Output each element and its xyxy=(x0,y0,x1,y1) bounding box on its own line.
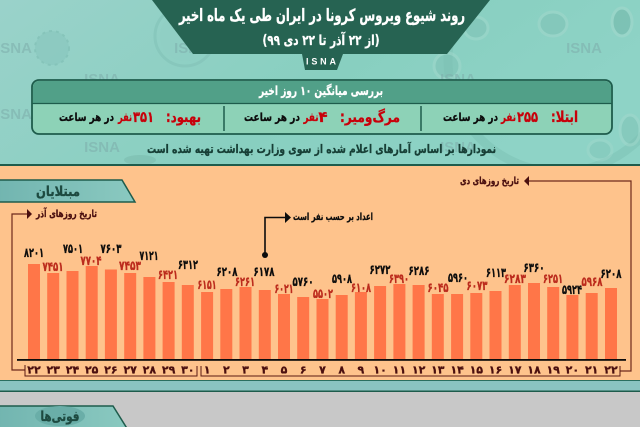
date axis labels: ۲۲ xyxy=(604,364,618,376)
value labels: ۷۴۵۳ xyxy=(119,259,141,274)
date axis labels: ۲۲ xyxy=(27,364,41,376)
date axis labels: ۸ xyxy=(338,364,345,376)
section tab: infected xyxy=(0,180,135,202)
date axis labels: ۱۰ xyxy=(373,364,387,376)
value labels: ۵۷۶۰ xyxy=(292,275,314,290)
bracket: Azar dates: تاریخ روزهای آذر xyxy=(35,207,97,220)
stat: recovered: ۳۵۱ xyxy=(133,108,154,126)
date axis labels: ۲۵ xyxy=(85,364,99,376)
date axis labels xyxy=(27,364,618,376)
date axis labels: ۲۱ xyxy=(585,364,598,376)
summary panel xyxy=(32,80,612,134)
value labels xyxy=(24,242,622,302)
value labels: ۷۶۰۳ xyxy=(100,242,122,257)
ISNA tab xyxy=(302,54,343,70)
section tab: infected: مبتلایان xyxy=(36,184,80,200)
value labels: ۵۵۰۲ xyxy=(313,287,333,302)
value labels: ۵۹۶۸ xyxy=(582,275,603,290)
value labels: ۶۳۱۲ xyxy=(178,258,198,273)
date axis labels: ۱۷ xyxy=(508,364,522,376)
date axis labels: ۲۰ xyxy=(566,364,579,376)
panel: infected chart xyxy=(0,164,640,380)
stat: recovered: بهبود: xyxy=(166,108,201,126)
date axis labels: ۱ xyxy=(204,364,210,376)
bar chart xyxy=(28,264,617,359)
bracket: Azar dates xyxy=(12,207,197,376)
value labels: ۶۲۸۶ xyxy=(408,264,430,279)
value labels: ۸۲۰۱ xyxy=(24,246,44,261)
value labels: ۶۱۵۱ xyxy=(198,278,216,293)
date axis labels: ۳ xyxy=(242,364,249,376)
date axis labels: ۲۸ xyxy=(143,364,156,376)
stat: deaths: در هر ساعت xyxy=(244,110,300,124)
value labels: ۶۱۰۸ xyxy=(351,281,371,296)
date axis labels: ۱۹ xyxy=(546,364,560,376)
stat: deaths: نفر xyxy=(303,110,318,124)
date axis labels: ۱۲ xyxy=(412,364,426,376)
stat: deaths: مرگ‌ومیر: xyxy=(340,108,400,126)
date axis labels: ۵ xyxy=(281,364,288,376)
bracket: Dey dates xyxy=(201,176,631,376)
value labels: ۶۲۰۸ xyxy=(600,267,622,282)
value labels: ۶۲۸۳ xyxy=(504,272,526,287)
value labels: ۵۹۲۴ xyxy=(562,283,582,298)
value labels: ۷۴۵۱ xyxy=(42,260,64,275)
date axis labels: ۱۵ xyxy=(470,364,483,376)
date axis labels: ۶ xyxy=(300,364,307,376)
subtitle: date range: (از ۲۲ آذر تا ۲۲ دی ۹۹) xyxy=(262,31,380,49)
header background with virus watermark: ISNA xyxy=(566,40,602,57)
date axis labels: ۳۰ xyxy=(181,364,195,376)
value labels: ۶۲۶۱ xyxy=(235,275,255,290)
date axis labels: ۱۶ xyxy=(489,364,502,376)
value labels: ۷۷۰۴ xyxy=(80,254,102,269)
value labels: ۵۹۶۰ xyxy=(448,271,468,286)
value labels: ۶۰۲۱ xyxy=(274,282,294,297)
date axis labels: ۷ xyxy=(319,364,326,376)
value labels: ۷۱۲۱ xyxy=(140,249,158,264)
teal separator band xyxy=(0,380,640,392)
source note: نمودارها بر اساس آمارهای اعلام شده از سوی وزارت بهداشت تهیه شده است xyxy=(147,141,496,157)
value labels: ۵۹۰۸ xyxy=(332,272,352,287)
value labels: ۶۰۴۵ xyxy=(428,281,449,296)
header background with virus watermark: ISNA xyxy=(440,139,476,156)
value labels: ۶۲۷۲ xyxy=(370,263,391,278)
date axis labels: ۲۹ xyxy=(162,364,176,376)
title line 1: روند شیوع ویروس کرونا در ایران طی یک ماه اخیر xyxy=(178,6,465,26)
section tab: deaths: فوتی‌ها xyxy=(40,409,80,425)
date axis labels: ۱۸ xyxy=(527,364,541,376)
section tab: deaths xyxy=(0,406,128,427)
stat: infected: نفر xyxy=(500,110,516,124)
value labels: ۶۱۷۸ xyxy=(254,265,275,280)
panel heading: بررسی میانگین ۱۰ روز اخیر xyxy=(258,83,383,98)
value labels: ۶۰۷۳ xyxy=(466,279,488,294)
header background with virus watermark xyxy=(0,0,640,172)
annotation: numbers are in persons xyxy=(262,212,373,258)
stat: infected: در هر ساعت xyxy=(443,110,498,124)
stat: recovered xyxy=(59,108,201,126)
date axis labels: ۱۴ xyxy=(450,364,464,376)
date axis labels: ۱۱ xyxy=(393,364,406,376)
chart baseline xyxy=(17,359,626,361)
header background with virus watermark: ISNA xyxy=(84,139,120,156)
value labels: ۷۵۰۱ xyxy=(63,242,83,257)
date axis labels: ۱۳ xyxy=(431,364,445,376)
stat: infected: ابتلا: xyxy=(551,108,578,126)
value labels: ۶۱۱۳ xyxy=(486,266,506,281)
header background with virus watermark: ISNA xyxy=(84,71,120,88)
stat: infected xyxy=(443,108,578,126)
date axis labels: ۲۴ xyxy=(66,364,79,376)
title banner xyxy=(152,0,490,54)
stat: infected: ۲۵۵ xyxy=(517,108,538,126)
date axis labels: ۲۷ xyxy=(123,364,137,376)
date axis labels: ۲ xyxy=(223,364,230,376)
header background with virus watermark: ISNA xyxy=(440,71,476,88)
value labels: ۶۳۶۰ xyxy=(524,261,544,276)
date axis labels: ۹ xyxy=(358,364,365,376)
bracket: Dey dates: تاریخ روزهای دی xyxy=(460,176,519,187)
value labels: ۶۲۵۱ xyxy=(543,272,563,287)
stat: recovered: در هر ساعت xyxy=(59,110,114,124)
date axis labels: ۴ xyxy=(261,364,268,376)
value labels: ۶۴۲۱ xyxy=(158,268,178,283)
date axis labels: ۲۶ xyxy=(104,364,118,376)
ISNA tab: ISNA xyxy=(306,56,336,66)
stat: deaths: ۴ xyxy=(318,108,328,126)
annotation: numbers are in persons: اعداد بر حسب نفر است xyxy=(293,212,373,223)
value labels: ۶۲۰۸ xyxy=(216,265,238,280)
stat: recovered: نفر xyxy=(117,110,132,124)
stat: deaths xyxy=(244,108,400,126)
value labels: ۶۳۹۰ xyxy=(389,272,409,287)
header background with virus watermark: ISNA xyxy=(174,40,210,57)
date axis labels: ۲۳ xyxy=(46,364,60,376)
